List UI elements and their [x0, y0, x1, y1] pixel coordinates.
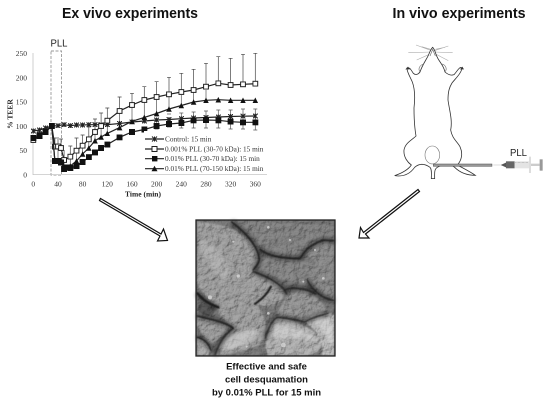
x axis labels: 0 [31, 180, 35, 188]
micrograph highlights [200, 240, 333, 350]
y axis labels: 200 [16, 74, 27, 82]
y axis labels [16, 49, 27, 180]
caption: Effective and safe [226, 361, 307, 372]
series: 0.01% PLL 30-70 kDa [33, 120, 255, 169]
y axis labels: 150 [16, 98, 27, 107]
legend [144, 131, 269, 173]
x axis labels [31, 180, 261, 188]
micrograph tissue folds [196, 220, 335, 356]
PLL treatment window label: PLL [50, 38, 68, 50]
micrograph panel [196, 220, 335, 356]
caption: by 0.01% PLL for 15 min [212, 388, 321, 399]
legend: 0.01% PLL 30-70: 0.01% PLL (30-70 kDa): 15 min [165, 155, 260, 163]
syringe label: PLL [510, 147, 527, 159]
x axis labels: 240 [176, 180, 187, 188]
forepaw tips [405, 67, 464, 69]
catheter [433, 164, 492, 166]
y axis labels: 0 [23, 170, 27, 180]
series: 0.001% PLL 30-70 kDa [33, 83, 255, 160]
micrograph surface specks [208, 226, 325, 348]
PLL treatment window dashed box [51, 51, 62, 175]
error bars [53, 53, 257, 160]
micrograph fold shadows [197, 222, 334, 355]
x axis labels: 320 [225, 180, 236, 188]
title: in vivo experiments: In vivo experiments [392, 6, 526, 22]
caption [212, 361, 321, 399]
y axis labels: 50 [20, 146, 27, 155]
x axis labels: 40 [54, 180, 62, 188]
tail base loop [425, 146, 440, 164]
arrow: rat to micrograph [359, 190, 420, 238]
syringe [501, 157, 543, 173]
x axis labels: 360 [250, 180, 261, 188]
x axis labels: 160 [126, 180, 138, 188]
legend: 0.001% PLL: 0.001% PLL (30-70 kDa): 15 min [165, 146, 264, 154]
rat body outline [395, 47, 475, 179]
micrograph base [196, 220, 335, 356]
micrograph cracks between folds [197, 222, 334, 355]
x axis labels: 280 [200, 180, 212, 188]
arrow: chart to micrograph [100, 198, 168, 241]
paw and snout details [419, 49, 446, 72]
series: 0.01% PLL 70-150 kDa [52, 100, 255, 167]
x axis labels: 200 [151, 180, 162, 188]
y axis title: % TEER [6, 99, 14, 129]
x axis labels: 120 [102, 180, 113, 188]
legend: control: Control: 15 min [165, 136, 212, 144]
y axis labels: 250 [16, 49, 27, 58]
line chart: percent TEER over time [6, 38, 269, 198]
rat illustration with syringe [395, 45, 543, 179]
legend: 0.01% PLL 70-150: 0.01% PLL (70-150 kDa): 15 min [165, 165, 264, 173]
x axis title: Time (min) [125, 190, 161, 198]
series: control [33, 116, 255, 131]
caption: cell desquamation [225, 375, 308, 386]
whiskers [408, 45, 453, 61]
x axis labels: 80 [79, 180, 87, 188]
x axis line [33, 53, 267, 175]
title: ex vivo experiments: Ex vivo experiments [62, 6, 198, 22]
micrograph frame [196, 220, 335, 356]
y axis labels: 100 [16, 122, 27, 131]
